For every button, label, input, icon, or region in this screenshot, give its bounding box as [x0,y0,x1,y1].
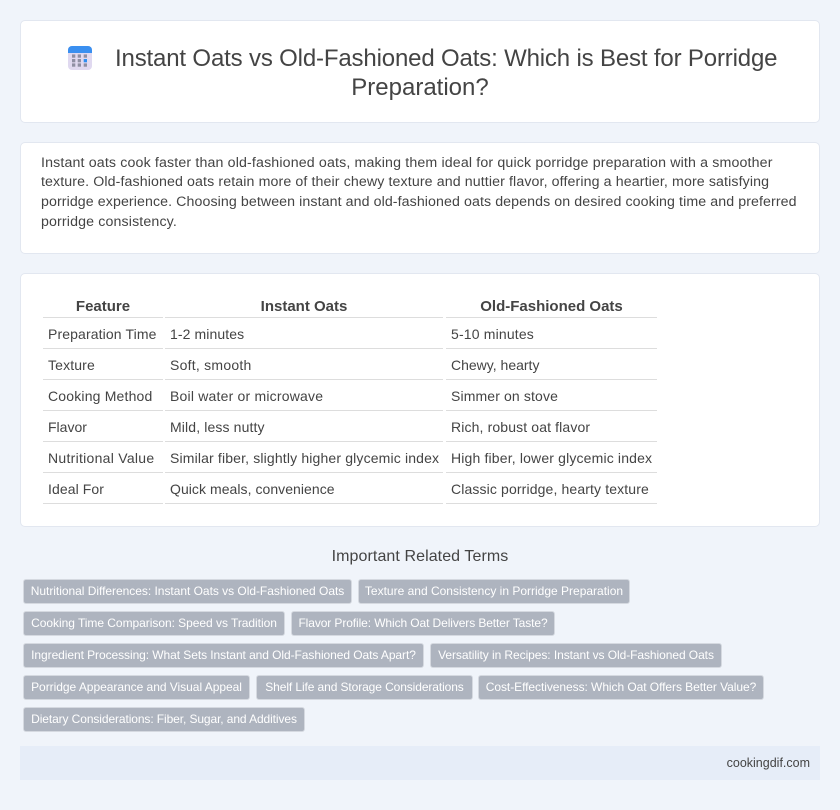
related terms heading: Important Related Terms [332,548,508,565]
column headers: Feature [76,298,130,315]
comparison table: High fiber, lower glycemic index [451,450,652,466]
comparison table: Flavor [48,419,87,435]
comparison table: Preparation Time [48,326,157,342]
footer bar [20,746,820,780]
comparison table [43,298,657,504]
related term tags: Porridge Appearance and Visual Appeal [31,680,242,694]
related term tags: Flavor Profile: Which Oat Delivers Better Taste? [298,616,548,630]
comparison table: Texture [48,357,95,373]
intro text: porridge consistency. [41,214,177,230]
comparison table: 5-10 minutes [451,326,534,342]
related term tags: Shelf Life and Storage Considerations [265,680,464,694]
title: Instant Oats vs Old-Fashioned Oats: Which is Best for Porridge [115,45,777,72]
title: Preparation? [351,74,489,101]
comparison table: Quick meals, convenience [170,481,335,497]
related term tags [23,579,764,732]
comparison table: Chewy, hearty [451,357,539,373]
related term tags: Versatility in Recipes: Instant vs Old-Fashioned Oats [438,648,714,662]
related term tags: Cost-Effectiveness: Which Oat Offers Better Value? [486,680,756,694]
comparison table: 1-2 minutes [170,326,244,342]
related term tags: Dietary Considerations: Fiber, Sugar, and Additives [31,712,297,726]
comparison table: Mild, less nutty [170,419,265,435]
comparison table: Simmer on stove [451,388,558,404]
related term tags: Cooking Time Comparison: Speed vs Tradition [31,616,277,630]
related term tags: Texture and Consistency in Porridge Preparation [365,584,623,598]
intro text: Instant oats cook faster than old-fashioned oats, making them ideal for quick porridge preparation with a smoother [41,155,773,171]
column headers [76,298,623,315]
comparison table: Classic porridge, hearty texture [451,481,649,497]
footer source: cookingdif.com [727,756,810,770]
intro text: porridge experience. Choosing between instant and old-fashioned oats depends on desired cooking time and preferred [41,194,797,210]
header card [20,20,820,123]
comparison table: Rich, robust oat flavor [451,419,590,435]
comparison table: Cooking Method [48,388,152,404]
column headers: Instant Oats [261,298,347,315]
title [115,45,777,101]
comparison table: Similar fiber, slightly higher glycemic index [170,450,439,466]
comparison table: Soft, smooth [170,357,252,373]
intro text: texture. Old-fashioned oats retain more of their chewy texture and nuttier flavor, offering a heartier, more satisfying [41,174,769,190]
intro card [20,142,820,254]
comparison table: Ideal For [48,481,104,497]
related term tags: Ingredient Processing: What Sets Instant and Old-Fashioned Oats Apart? [31,648,416,662]
related term tags: Nutritional Differences: Instant Oats vs Old-Fashioned Oats [31,584,344,598]
table card [20,273,820,527]
intro text [41,155,797,230]
comparison table: Boil water or microwave [170,388,323,404]
icon: calendar [68,46,92,70]
comparison table: Nutritional Value [48,450,154,466]
column headers: Old-Fashioned Oats [480,298,623,315]
